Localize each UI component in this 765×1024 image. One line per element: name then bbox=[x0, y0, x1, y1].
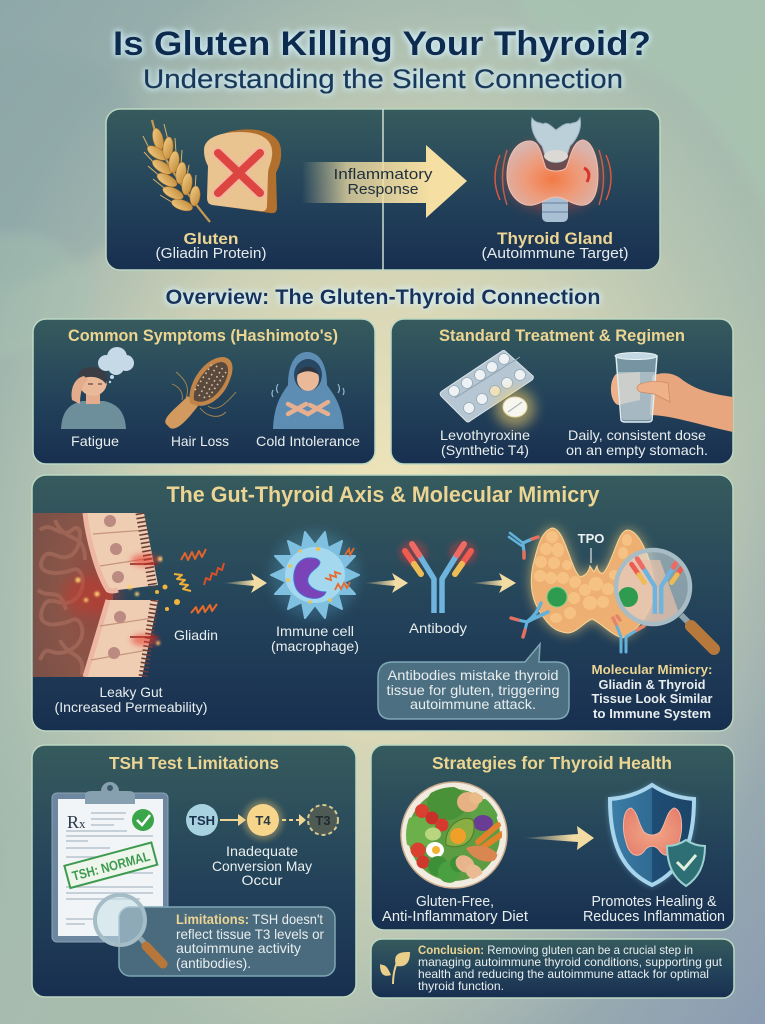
label: levothyroxine bbox=[440, 427, 530, 458]
heading: strategies: Strategies for Thyroid Health bbox=[432, 753, 672, 773]
heading: standard treatment: Standard Treatment & Regimen bbox=[439, 326, 685, 345]
diagram: TSH to T4 to T3: T4 bbox=[255, 813, 271, 828]
label: molecular mimicry: to Immune System bbox=[593, 706, 711, 721]
icon: blister pack bbox=[440, 350, 535, 428]
callout: limitations: (antibodies). bbox=[176, 955, 251, 971]
icon: macrophage bbox=[271, 531, 359, 619]
label: leaky gut: (Increased Permeability) bbox=[54, 699, 208, 715]
icon: fatigue bbox=[61, 347, 134, 429]
diagram: TSH to T4 to T3 bbox=[186, 800, 338, 840]
callout: antibodies: Antibodies mistake thyroid bbox=[388, 667, 558, 683]
label: thyroid gland: Thyroid Gland bbox=[497, 230, 613, 248]
label: gluten: (Gliadin Protein) bbox=[156, 246, 266, 262]
label: thyroid gland: (Autoimmune Target) bbox=[482, 246, 628, 262]
arrow: diet to healing bbox=[522, 826, 594, 850]
heading: common symptoms: Common Symptoms (Hashimoto's) bbox=[68, 326, 338, 345]
icon: shield with thyroid bbox=[608, 783, 705, 887]
icon: antibody bbox=[399, 541, 477, 613]
icon: small check shield bbox=[667, 840, 705, 886]
label: leaky gut bbox=[54, 684, 208, 715]
title: Is Gluten Killing Your Thyroid? bbox=[113, 25, 651, 63]
callout: antibodies bbox=[378, 644, 569, 719]
icon: green check bbox=[132, 809, 154, 831]
heading: overview: Overview: The Gluten-Thyroid Connection bbox=[166, 286, 600, 309]
callout: antibodies: tissue for gluten, triggering bbox=[386, 682, 560, 698]
panel: strategies for thyroid health bbox=[371, 745, 734, 930]
arrow: inflammatory response bbox=[302, 145, 467, 218]
label: inadequate conversion: Inadequate bbox=[226, 843, 298, 859]
icon: hand holding water glass bbox=[611, 352, 733, 432]
label: diet: Gluten-Free, bbox=[416, 894, 494, 910]
callout: limitations bbox=[119, 907, 335, 976]
icon: hair brush bbox=[165, 357, 236, 429]
label: gluten bbox=[156, 231, 266, 262]
text: conclusion: managing autoimmune thyroid conditions, supporting gut bbox=[418, 955, 723, 969]
label: hair loss: Hair Loss bbox=[171, 433, 229, 449]
label: healing bbox=[583, 894, 725, 925]
label: cold intolerance: Cold Intolerance bbox=[256, 433, 360, 449]
icon: gliadin fragments bbox=[155, 549, 224, 613]
label: Rx: Rx bbox=[67, 812, 86, 832]
heading: gut-thyroid axis: The Gut-Thyroid Axis & Molecular Mimicry bbox=[166, 482, 600, 507]
callout: limitations: autoimmune activity bbox=[176, 940, 301, 956]
label: TPO: TPO bbox=[578, 531, 604, 546]
icon: sprout bbox=[380, 952, 410, 984]
label: diet bbox=[382, 894, 528, 925]
icon: salad plate bbox=[400, 782, 507, 888]
label: daily dose bbox=[566, 427, 708, 458]
callout: antibodies: autoimmune attack. bbox=[410, 696, 536, 712]
arrow: immune cell to antibody bbox=[363, 573, 408, 593]
icon: wheat bbox=[143, 120, 210, 222]
label: molecular mimicry: Tissue Look Similar bbox=[592, 691, 712, 706]
icon: clipboard report bbox=[52, 782, 168, 942]
label: inadequate conversion: Conversion May bbox=[212, 858, 312, 874]
arrow: inflammatory response: Response bbox=[348, 181, 418, 198]
label: daily dose: Daily, consistent dose bbox=[568, 427, 706, 443]
label: diet: Anti-Inflammatory Diet bbox=[382, 909, 528, 925]
label: levothyroxine: (Synthetic T4) bbox=[441, 442, 529, 458]
label: inadequate conversion: Occur bbox=[242, 872, 283, 888]
label: gliadin: Gliadin bbox=[174, 627, 218, 643]
diagram: TSH to T4 to T3: T3 bbox=[315, 813, 331, 828]
label: molecular mimicry: Gliadin & Thyroid bbox=[598, 677, 706, 692]
text: conclusion bbox=[418, 943, 723, 993]
label: levothyroxine: Levothyroxine bbox=[440, 427, 530, 443]
diagram: TSH to T4 to T3: TSH bbox=[189, 813, 215, 828]
label: thyroid gland bbox=[482, 230, 628, 262]
subtitle: Understanding the Silent Connection bbox=[143, 64, 623, 94]
label: immune cell: Immune cell bbox=[276, 623, 354, 639]
icon: thyroid with TPO and magnifier bbox=[509, 528, 714, 652]
arrow: gliadin to immune cell bbox=[222, 573, 267, 593]
heading: TSH test limitations: TSH Test Limitations bbox=[109, 753, 279, 773]
icon: magnifier bbox=[95, 895, 163, 964]
label: leaky gut: Leaky Gut bbox=[100, 684, 163, 700]
label: immune cell bbox=[271, 623, 359, 654]
panel: common symptoms bbox=[33, 319, 375, 464]
label: immune cell: (macrophage) bbox=[271, 638, 359, 654]
panel: conclusion bbox=[371, 939, 734, 998]
label: healing: Reduces Inflammation bbox=[583, 909, 725, 925]
icon: bread with red X bbox=[204, 129, 281, 213]
icon: small antibodies bbox=[509, 533, 644, 652]
panel: TSH test limitations bbox=[32, 745, 356, 997]
illustration: leaky gut bbox=[33, 513, 162, 677]
text: conclusion: health and reducing the autoimmune attack for optimal bbox=[418, 967, 709, 981]
panel: standard treatment bbox=[391, 319, 733, 464]
callout: limitations: Limitations: TSH doesn't bbox=[176, 911, 323, 927]
label: inadequate conversion bbox=[212, 843, 312, 888]
label: healing: Promotes Healing & bbox=[592, 894, 717, 910]
panel: gut-thyroid axis bbox=[32, 475, 733, 731]
label: antibody: Antibody bbox=[409, 620, 467, 636]
label: fatigue: Fatigue bbox=[71, 433, 119, 449]
stamp: TSH normal: TSH: NORMAL bbox=[71, 849, 152, 884]
icon: cold intolerance bbox=[272, 352, 344, 429]
text: conclusion: Conclusion: Removing gluten can be a crucial step in bbox=[418, 943, 693, 957]
label: molecular mimicry bbox=[592, 662, 712, 721]
text: conclusion: thyroid function. bbox=[418, 979, 504, 993]
arrow: inflammatory response: Inflammatory bbox=[334, 166, 433, 183]
arrow: antibody to thyroid bbox=[470, 573, 516, 593]
label: molecular mimicry: Molecular Mimicry: bbox=[592, 662, 712, 677]
panel: gluten to thyroid bbox=[106, 109, 660, 270]
label: gluten: Gluten bbox=[184, 231, 238, 248]
icon: thyroid gland bbox=[495, 118, 611, 222]
label: daily dose: on an empty stomach. bbox=[566, 442, 708, 458]
callout: limitations: reflect tissue T3 levels or bbox=[176, 926, 324, 942]
